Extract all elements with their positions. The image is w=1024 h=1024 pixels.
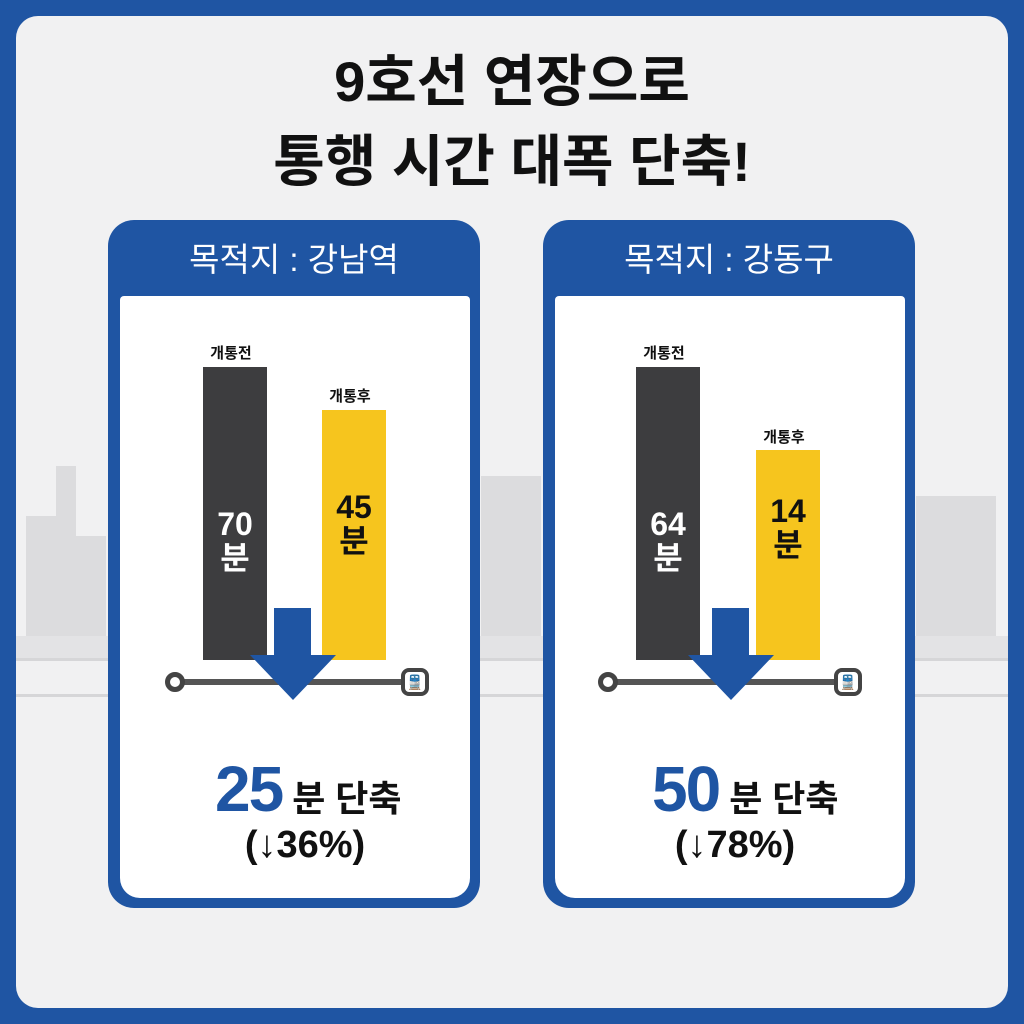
- bar after: 45: [336, 489, 372, 525]
- panel: 강남역: [108, 220, 480, 908]
- panel: 강남역: (↓36%): [245, 824, 365, 866]
- label before: 개통전: [210, 345, 252, 362]
- arrow: [688, 608, 774, 700]
- track: 🚆: [406, 674, 424, 690]
- label after: 개통후: [329, 388, 371, 405]
- header: 목적지 : 강동구: [624, 241, 834, 278]
- title: 통행 시간 대폭 단축!: [273, 130, 751, 193]
- panel: 강동구: [543, 220, 915, 908]
- bar before: 분: [653, 540, 683, 576]
- bar after: [756, 450, 820, 660]
- result: 25 분 단축: [215, 753, 402, 825]
- label after: 개통후: [763, 429, 805, 446]
- bar after: [322, 410, 386, 660]
- track: [165, 668, 429, 696]
- result: 50 분 단축: [652, 753, 839, 825]
- title: 9호선 연장으로: [334, 50, 690, 113]
- bar after: 분: [773, 527, 803, 563]
- bar after: 14: [770, 493, 806, 529]
- arrow: [250, 608, 336, 700]
- bar after: 분: [339, 523, 369, 559]
- track: [598, 668, 862, 696]
- bar before: 70: [217, 506, 253, 542]
- bar before: [203, 367, 267, 660]
- bar before: 64: [650, 506, 686, 542]
- bar before: 분: [220, 540, 250, 576]
- panel: 강동구: (↓78%): [675, 824, 795, 866]
- label before: 개통전: [643, 345, 685, 362]
- bar before: [636, 367, 700, 660]
- track: 🚆: [839, 674, 857, 690]
- header: 목적지 : 강남역: [189, 241, 399, 278]
- background skyline: [16, 466, 1008, 697]
- title: [273, 50, 751, 193]
